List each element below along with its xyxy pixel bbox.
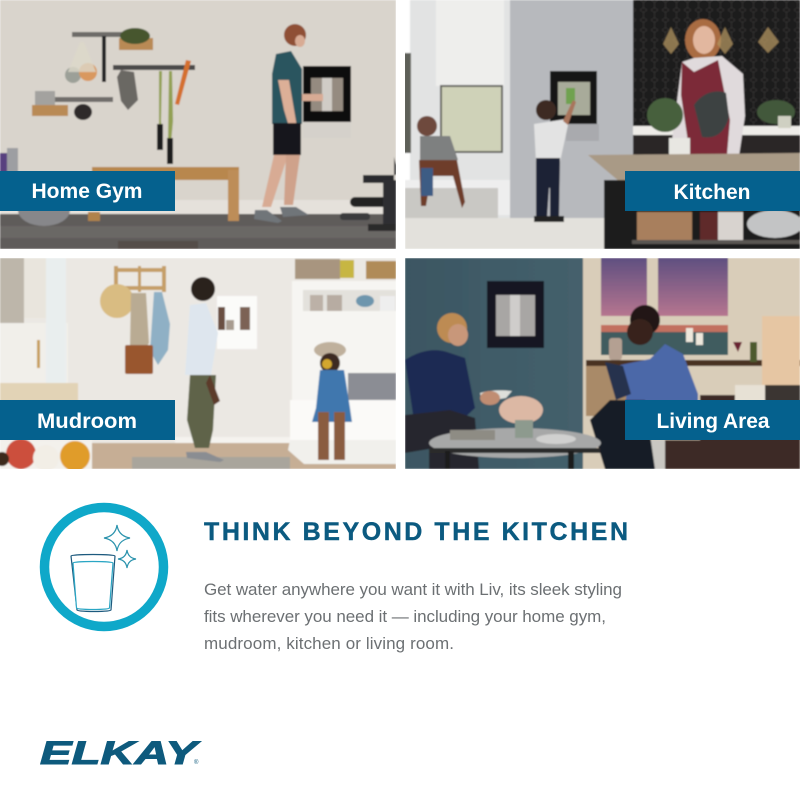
- kitchen island: [588, 153, 800, 249]
- icon: sparkling glass of water in ring: [44, 508, 164, 626]
- panel: home gym photo: [0, 0, 396, 249]
- wall rack with plant, net bag and accessories: [32, 28, 195, 164]
- coffee table with flowers: [429, 396, 601, 469]
- exercise ball and foam roller: [0, 148, 70, 226]
- man using the wall water dispenser: [254, 24, 351, 223]
- white storage bench with shelves: [288, 259, 396, 464]
- logo: Elkay: [40, 735, 201, 771]
- label: Living Area: Living Area: [656, 409, 771, 433]
- body text: fits wherever you need it — including your home gym,: [204, 607, 606, 626]
- weight bench and dumbbells: [340, 157, 396, 231]
- heading: THINK BEYOND THE KITCHEN: [204, 518, 628, 546]
- wooden bench: [88, 167, 239, 221]
- body text: [204, 580, 622, 653]
- panel: living area photo: [405, 258, 800, 469]
- label: Kitchen: Kitchen: [674, 180, 750, 204]
- body text: mudroom, kitchen or living room.: [204, 634, 454, 653]
- child in high chair: [417, 116, 465, 208]
- flowers: [0, 439, 92, 471]
- label: Living Area: [625, 400, 800, 440]
- label: Kitchen: [625, 171, 800, 211]
- pendant lights: [663, 27, 779, 54]
- cabinets and door: [0, 258, 78, 403]
- logo: Elkay: ®: [194, 759, 199, 766]
- panel: kitchen photo: [404, 0, 800, 249]
- wine bottle and glass: [686, 328, 757, 362]
- girl with sunflower on bench: [312, 342, 352, 460]
- wall-mounted dispenser: [487, 281, 544, 348]
- panel: mudroom photo: [0, 258, 396, 471]
- woman at framed dispenser: [185, 277, 257, 462]
- label: Home Gym: [0, 171, 175, 211]
- label: Mudroom: Mudroom: [37, 409, 137, 433]
- man with plate, seated left: [405, 313, 512, 469]
- label: Home Gym: Home Gym: [32, 179, 142, 203]
- body text: Get water anywhere you want it with Liv, its sleek styling: [204, 580, 622, 599]
- coat rack with hat and bag: [100, 266, 170, 374]
- woman watering plant: [647, 19, 795, 163]
- dispenser screen with boy: [534, 71, 599, 222]
- man drinking, seated right: [590, 305, 698, 469]
- logo: Elkay: ELKAY: [40, 735, 201, 771]
- label: Mudroom: [0, 400, 175, 440]
